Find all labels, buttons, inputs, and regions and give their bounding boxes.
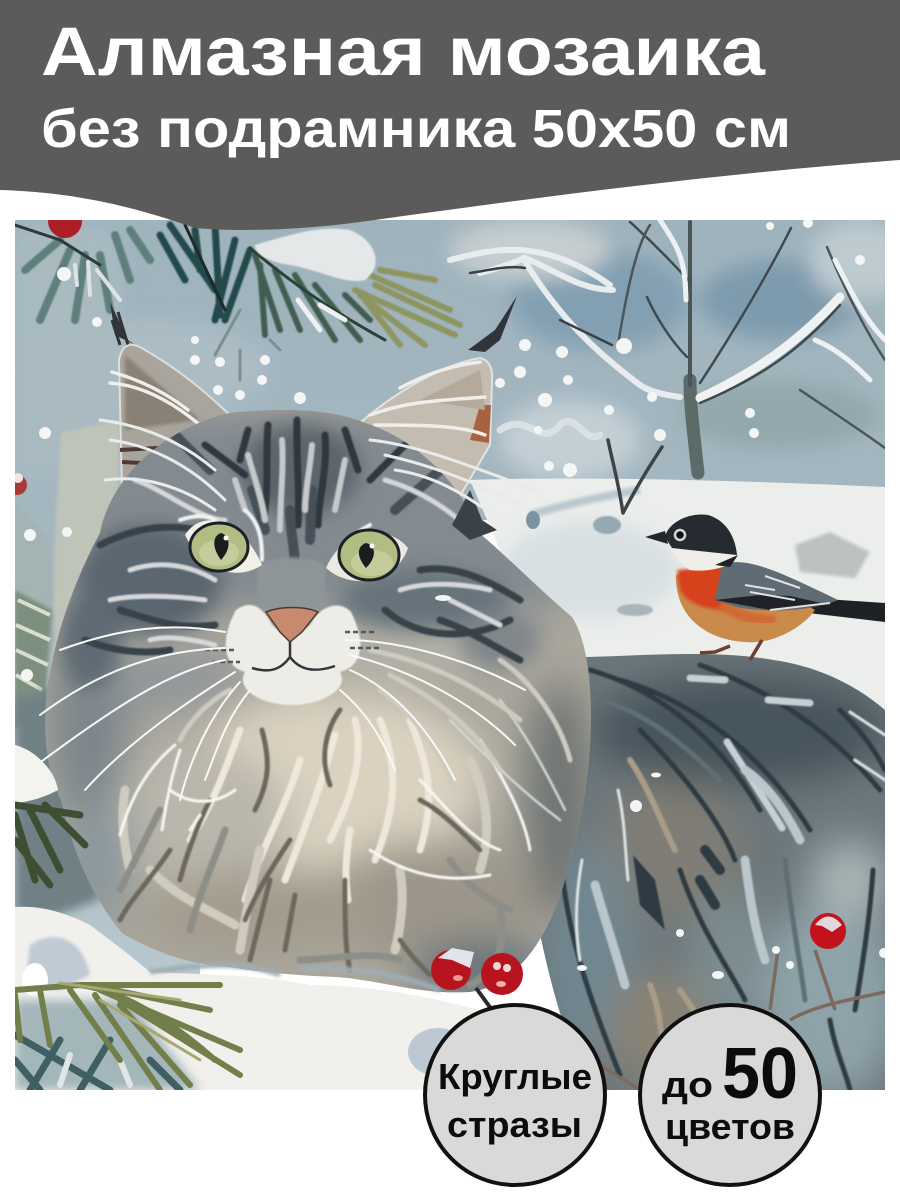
bare twig bottom right [600, 950, 885, 1090]
badge: up to 50 colours: 50 [722, 1034, 798, 1114]
pine branch: bottom left [15, 805, 240, 1090]
bird legs [700, 640, 762, 660]
left background panel [15, 230, 120, 930]
badge: round rhinestones: стразы [447, 1104, 582, 1145]
bird head [665, 514, 737, 555]
nose [266, 608, 318, 642]
chest fur strokes [120, 700, 565, 985]
falling snow [21, 218, 865, 681]
badge: up to 50 colours [640, 1005, 820, 1185]
fur colour masses [50, 410, 595, 1000]
bird tail [810, 600, 885, 622]
badge: round rhinestones [425, 1005, 605, 1185]
cat back and tail [540, 654, 885, 1090]
cat body and head [39, 410, 591, 992]
subtitle: без подрамника 50х50 см [41, 99, 791, 159]
pine branch: top left [15, 225, 460, 380]
nose bridge [259, 556, 324, 597]
snow on pine branch [255, 229, 376, 281]
distant blue-grey trees [128, 220, 885, 478]
dark neck patch [452, 490, 497, 540]
bird [645, 514, 885, 660]
bird cheek [672, 548, 725, 571]
windswept ear fur [98, 418, 510, 512]
bottom snow [15, 745, 480, 1090]
badge: up to 50 colours: цветов [665, 1106, 795, 1147]
mouth [252, 642, 335, 670]
bird body [676, 560, 815, 642]
badge: round rhinestones: Круглые [438, 1056, 592, 1097]
header banner [0, 0, 900, 230]
bird eye [675, 530, 685, 540]
eye: left [185, 520, 262, 573]
snow shadows [500, 490, 870, 620]
bare trees [450, 220, 885, 513]
snowy ground [470, 478, 885, 710]
eye: right [326, 530, 408, 581]
red berries [7, 204, 846, 1010]
badge: up to 50 colours: до [662, 1064, 713, 1105]
fur above whiskers [180, 650, 570, 790]
dark fur patch on back [633, 855, 665, 930]
illustration: cat and bird in winter forest [7, 204, 900, 1100]
bird wing [715, 562, 838, 610]
whisker spots [205, 632, 380, 662]
cat ears [108, 296, 517, 496]
muzzle [226, 605, 360, 705]
winter sky background [15, 220, 885, 1000]
whiskers [30, 627, 525, 800]
bird beak [645, 531, 668, 544]
cheek and forehead fur strokes [85, 420, 520, 660]
snow dots on cat [435, 595, 889, 979]
title: Алмазная мозаика [41, 13, 766, 90]
